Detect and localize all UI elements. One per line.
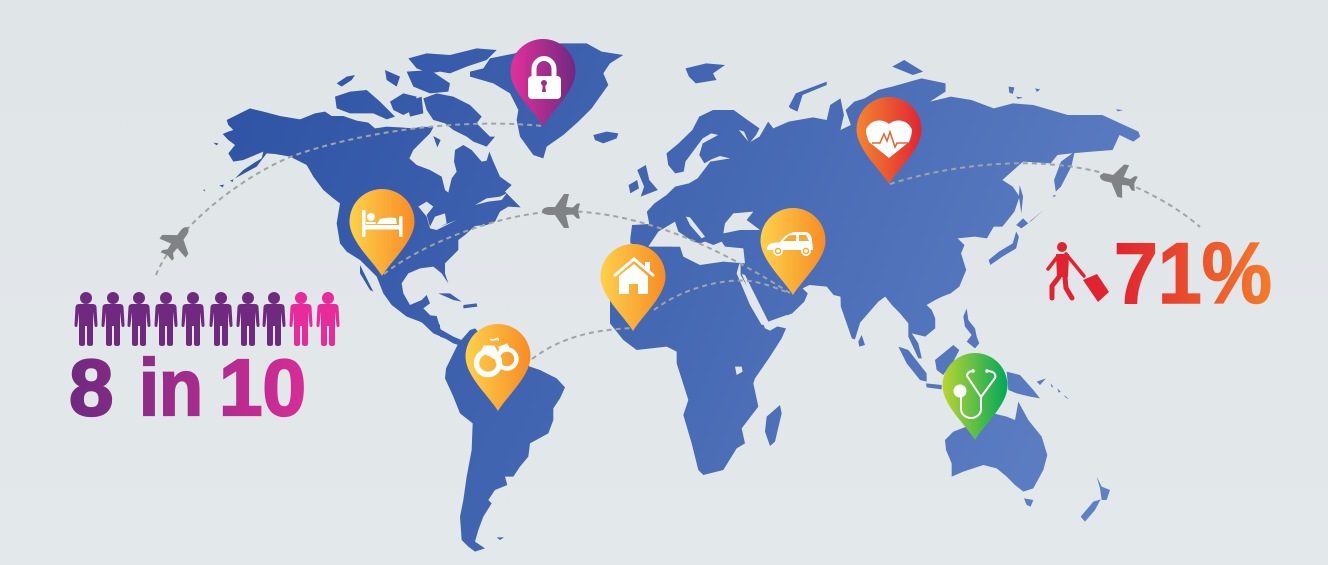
stat: 8 in 10: in bbox=[139, 343, 203, 432]
people pictogram: 8 of 10 highlighted bbox=[74, 292, 340, 346]
icon: heart with pulse bbox=[866, 121, 912, 158]
stat: 8 in 10: 8 bbox=[69, 343, 114, 432]
pin: heart bbox=[856, 97, 922, 184]
icon: plane centre bbox=[542, 194, 580, 228]
icon: plane right bbox=[1096, 160, 1140, 200]
icon: handcuffs bbox=[476, 338, 516, 374]
icon: house bbox=[613, 257, 655, 294]
icon: plane left bbox=[153, 218, 201, 266]
pin: bed bbox=[350, 189, 414, 276]
icon: stethoscope bbox=[954, 369, 995, 418]
pin: house bbox=[600, 244, 666, 331]
pin: stethoscope bbox=[942, 353, 1008, 440]
icon: padlock bbox=[528, 59, 561, 99]
world map bbox=[203, 43, 1140, 552]
stat: 71%: 71% bbox=[1114, 226, 1272, 322]
icon: bed bbox=[362, 210, 402, 237]
dashed flight paths bbox=[156, 124, 1200, 359]
pin: car bbox=[760, 208, 826, 295]
icon: traveller with suitcase bbox=[1048, 242, 1109, 302]
pin: padlock bbox=[510, 39, 576, 126]
icon: car bbox=[767, 232, 813, 256]
stat: 8 in 10: 10 bbox=[219, 343, 306, 432]
pin: handcuffs bbox=[466, 324, 530, 411]
